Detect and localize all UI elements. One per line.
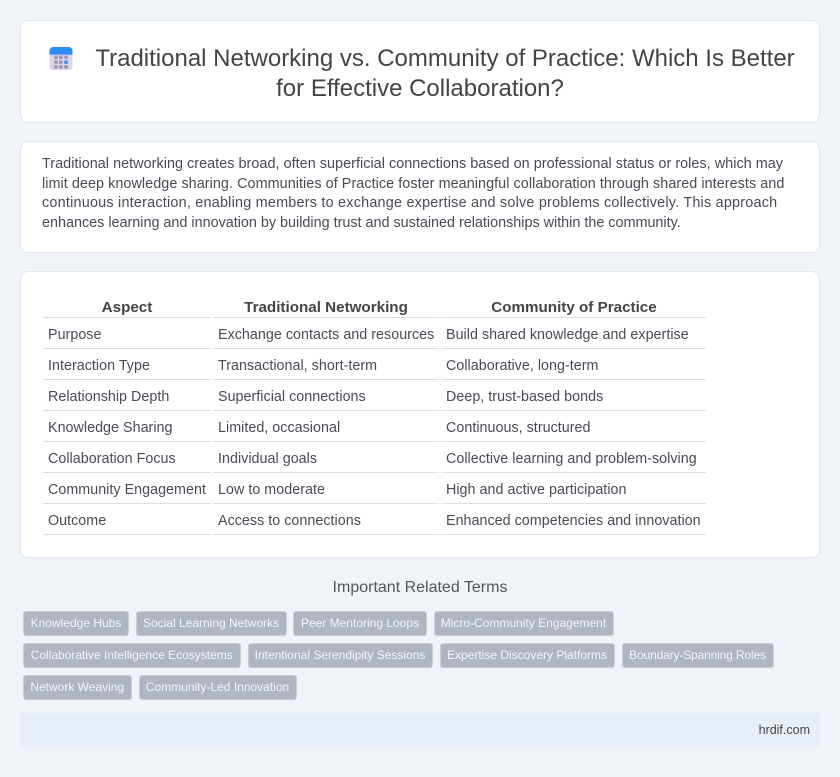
tag [440,642,614,668]
tag [293,610,427,636]
table header [102,299,657,316]
text block: introduction: limit deep knowledge sharing. Communities of Practice foster meaningful collaboration through shared interests and [42,176,784,192]
table header: Community of Practice [491,299,657,316]
tag: Intentional Serendipity Sessions [255,648,425,662]
heading: related terms: Important Related Terms [333,579,507,596]
text block: introduction [42,156,784,230]
tag: Collaborative Intelligence Ecosystems [31,648,233,662]
row: Interaction Type: Collaborative, long-term [446,358,598,374]
row: Outcome: Access to connections [218,513,361,529]
icon: calendar [49,47,73,70]
row: Interaction Type: Interaction Type [48,358,150,374]
row: Relationship Depth: Superficial connections [218,389,366,405]
panel: intro paragraph [20,141,820,253]
row: Collaboration Focus [48,451,697,467]
tag: Expertise Discovery Platforms [447,648,607,662]
text block: introduction: enhances learning and innovation by building trust and sustained relationships within the community. [42,214,681,230]
tag: Knowledge Hubs [31,616,121,630]
row: Purpose: Build shared knowledge and expertise [446,327,689,343]
row: Community Engagement: Low to moderate [218,482,325,498]
row: Purpose: Exchange contacts and resources [218,327,434,343]
row: Relationship Depth: Relationship Depth [48,389,169,405]
row: Outcome: Enhanced competencies and innovation [446,513,701,529]
row: Community Engagement: High and active participation [446,482,626,498]
footer bar [20,713,820,747]
row: Collaboration Focus: Collective learning and problem-solving [446,451,697,467]
tag [248,642,432,668]
table header: Traditional Networking [244,299,408,316]
text block: introduction: continuous interaction, enabling members to exchange expertise and solve problems collectively. This approach [42,195,777,211]
panel: header card [20,20,820,123]
tag [23,674,132,700]
tag [138,674,296,700]
row: Interaction Type: Transactional, short-term [218,358,377,374]
row: Collaboration Focus: Individual goals [218,451,317,467]
tag: Community-Led Innovation [146,680,289,694]
row: Knowledge Sharing: Knowledge Sharing [48,420,173,436]
title: Traditional Networking vs. Community of Practice: Which Is Better [95,45,795,72]
tag [434,610,614,636]
tag: Boundary-Spanning Roles [629,648,766,662]
footer source: hrdif.com [759,723,810,737]
tag: Network Weaving [30,680,124,694]
tag: Micro-Community Engagement [441,616,606,630]
title: for Effective Collaboration? [276,74,564,102]
row: Relationship Depth [48,389,603,405]
row: Relationship Depth: Deep, trust-based bonds [446,389,603,405]
row: Outcome [48,513,701,529]
row: Collaboration Focus: Collaboration Focus [48,451,176,467]
row: Community Engagement [48,482,626,498]
row: Knowledge Sharing: Limited, occasional [218,420,340,436]
row: Knowledge Sharing [48,420,591,436]
table header: Aspect [102,299,152,316]
row: Community Engagement: Community Engagement [48,482,206,498]
tag [136,610,286,636]
row: Purpose [48,327,689,343]
title [95,45,795,102]
text block: introduction: Traditional networking creates broad, often superficial connections based on professional status or roles, which may [42,156,783,172]
row: Interaction Type [48,358,598,374]
tag [23,610,129,636]
tag: Peer Mentoring Loops [301,616,419,630]
tag list: related terms [23,611,774,700]
row: Knowledge Sharing: Continuous, structured [446,420,591,436]
panel: comparison table [20,271,820,558]
tag [23,642,240,668]
row: Outcome: Outcome [48,513,106,529]
row: Purpose: Purpose [48,327,101,343]
tag: Social Learning Networks [143,616,279,630]
tag [622,642,774,668]
